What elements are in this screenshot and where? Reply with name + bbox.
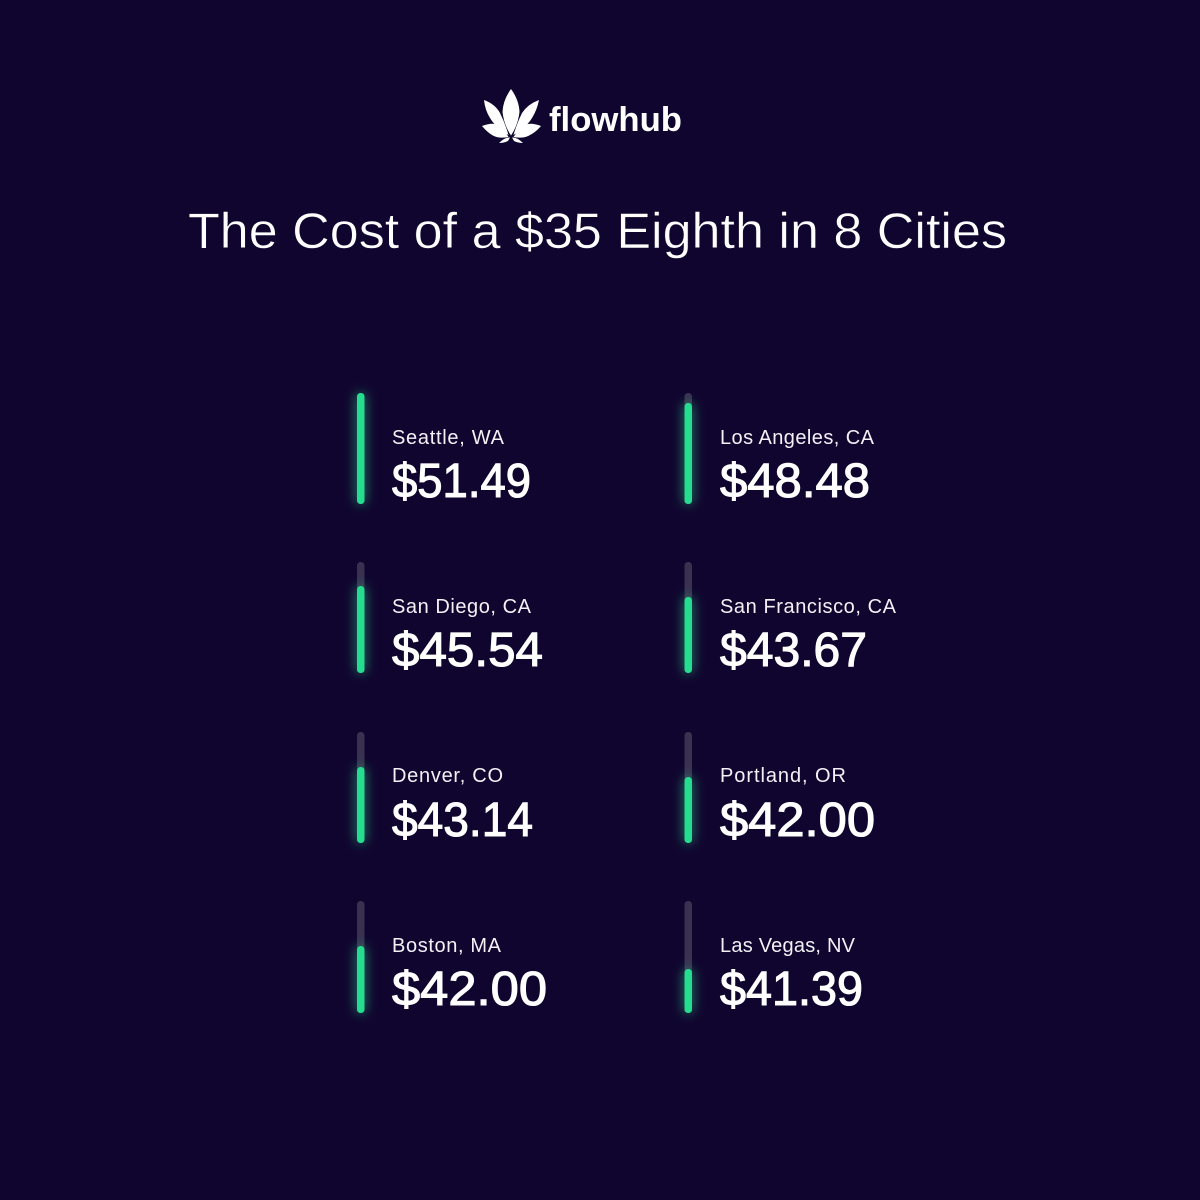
value: Boston: $42.00 bbox=[392, 963, 547, 1016]
bar: Los Angeles bbox=[684, 393, 692, 504]
value: Las Vegas: $41.39 bbox=[720, 963, 863, 1016]
label: Denver: Denver, CO bbox=[392, 765, 503, 787]
label: Portland: Portland, OR bbox=[720, 765, 846, 787]
label: San Diego: San Diego, CA bbox=[392, 596, 532, 618]
city: San Francisco bbox=[684, 562, 897, 677]
value: San Francisco: $43.67 bbox=[720, 624, 867, 677]
value: Seattle: $51.49 bbox=[392, 455, 531, 508]
wordmark: flowhub bbox=[549, 101, 682, 139]
icon: cannabis leaf bbox=[482, 89, 541, 143]
city: Seattle bbox=[357, 393, 531, 508]
bar: Boston bbox=[357, 901, 364, 1013]
title: The Cost of a $35 Eighth in 8 Cities bbox=[188, 203, 1007, 259]
bar: San Diego bbox=[357, 562, 364, 673]
value: Portland: $42.00 bbox=[720, 794, 875, 847]
value: Los Angeles: $48.48 bbox=[720, 455, 870, 508]
city: Boston bbox=[357, 901, 547, 1016]
label: Seattle: Seattle, WA bbox=[392, 427, 505, 449]
city: Las Vegas bbox=[684, 901, 863, 1016]
label: Boston: Boston, MA bbox=[392, 935, 502, 957]
city: Portland bbox=[684, 732, 875, 847]
logo bbox=[482, 89, 682, 143]
value: Denver: $43.14 bbox=[392, 794, 533, 847]
bar: Denver bbox=[357, 732, 364, 843]
bar: Las Vegas bbox=[684, 901, 692, 1013]
bar: Seattle bbox=[357, 393, 364, 504]
city: San Diego bbox=[357, 562, 543, 677]
city: Denver bbox=[357, 732, 533, 847]
label: Los Angeles: Los Angeles, CA bbox=[720, 427, 875, 449]
label: Las Vegas: Las Vegas, NV bbox=[720, 935, 856, 957]
bar: San Francisco bbox=[684, 562, 692, 673]
city: Los Angeles bbox=[684, 393, 875, 508]
bar: Portland bbox=[684, 732, 692, 843]
value: San Diego: $45.54 bbox=[392, 624, 543, 677]
label: San Francisco: San Francisco, CA bbox=[720, 596, 897, 618]
